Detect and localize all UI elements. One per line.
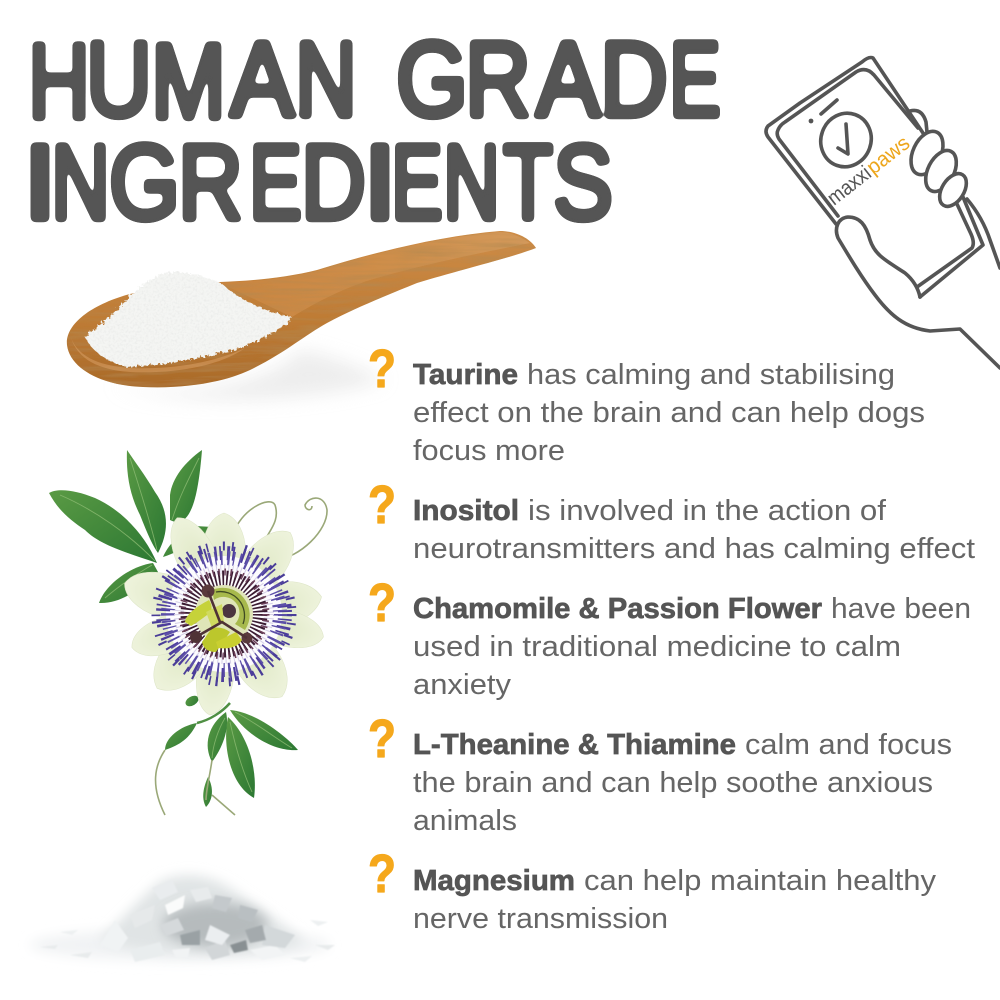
ingredient: taurine [368, 339, 925, 467]
title line 2: I [23, 122, 57, 242]
taurine text: effect on the brain and can help dogs [413, 397, 925, 429]
flower centre [185, 584, 253, 652]
leaves [49, 450, 298, 807]
leaf veins [60, 458, 292, 792]
l-theanine text: L-Theanine & Thiamine [413, 729, 736, 761]
ingredient: l-theanine and thiamine [368, 709, 952, 837]
l-theanine text [413, 729, 952, 837]
title line 2: S [553, 122, 613, 242]
magnesium text: can help maintain healthy [584, 865, 937, 897]
title line 1: N [295, 19, 357, 139]
inositol text: neurotransmitters and has calming effect [413, 533, 975, 565]
title line 2: G [109, 122, 180, 242]
title line 2: E [391, 122, 443, 242]
inositol text [413, 495, 975, 565]
chamomile text: Chamomile & Passion Flower [413, 593, 822, 625]
phone body [766, 58, 983, 297]
question mark icon: ? [368, 709, 396, 769]
petals [118, 509, 327, 718]
title line 1: A [536, 19, 601, 139]
chamomile text: used in traditional medicine to calm [413, 631, 901, 663]
question mark icon: ? [368, 844, 396, 904]
taurine text [413, 359, 925, 467]
image: passion flower [49, 450, 327, 815]
ingredient: inositol [368, 475, 975, 565]
flakes [40, 880, 335, 962]
maxxipaws logo: paws [862, 131, 914, 179]
title line 1 [28, 19, 721, 141]
spoon shadow [110, 350, 385, 400]
title line 2: E [249, 122, 302, 242]
taurine text: focus more [413, 435, 565, 467]
magnesium text [413, 865, 937, 935]
dark centre [163, 903, 267, 947]
title line 1: D [600, 19, 668, 139]
taurine text: has calming and stabilising [527, 359, 895, 391]
tendrils [156, 498, 327, 815]
image: magnesium flakes pile [30, 876, 335, 962]
l-theanine text: animals [413, 805, 517, 837]
title line 2: R [178, 122, 243, 242]
inositol text: is involved in the action of [528, 495, 887, 527]
title line 2 [23, 122, 613, 242]
l-theanine text: the brain and can help soothe anxious [413, 767, 933, 799]
magnesium text: Magnesium [413, 865, 575, 897]
title line 1: U [86, 19, 152, 139]
pile [100, 876, 305, 954]
ingredient: magnesium [368, 844, 937, 935]
fingers [905, 110, 972, 211]
filaments [156, 546, 292, 682]
question mark icon: ? [368, 475, 396, 535]
question mark icon: ? [368, 573, 396, 633]
title line 1: H [28, 21, 90, 141]
spoon handle highlight [220, 232, 530, 317]
title line 2: N [51, 122, 110, 242]
ingredient: chamomile and passion flower [368, 573, 971, 701]
title: human grade ingredients [23, 19, 721, 242]
chamomile text: have been [831, 593, 971, 625]
question mark icon: ? [368, 339, 396, 399]
title line 1: M [151, 21, 226, 141]
chamomile text [413, 593, 971, 701]
maxxipaws logo [823, 131, 914, 210]
inositol text: Inositol [413, 495, 519, 527]
check mark circle [813, 106, 879, 174]
title line 1: E [669, 19, 721, 139]
powder [85, 272, 292, 367]
spoon front rim [71, 338, 245, 372]
title line 2: T [503, 122, 553, 242]
speaker and camera [821, 100, 837, 114]
l-theanine text: calm and focus [745, 729, 952, 761]
title line 2: D [301, 122, 366, 242]
title line 2: I [363, 122, 397, 242]
spoon body [67, 231, 536, 387]
maxxipaws logo: maxxi [823, 162, 876, 210]
thumb and arm [836, 199, 1000, 368]
title line 1: R [465, 19, 531, 139]
magnesium text: nerve transmission [413, 903, 668, 935]
title line 1: A [230, 19, 295, 139]
taurine text: Taurine [413, 359, 518, 391]
scattered flakes [30, 929, 330, 961]
phone screen [777, 70, 973, 287]
title line 1: G [396, 19, 468, 139]
title line 2: N [443, 122, 500, 242]
image: wooden spoon with powder [67, 231, 536, 400]
chamomile text: anxiety [413, 669, 512, 701]
icon: hand holding phone [766, 58, 1000, 368]
